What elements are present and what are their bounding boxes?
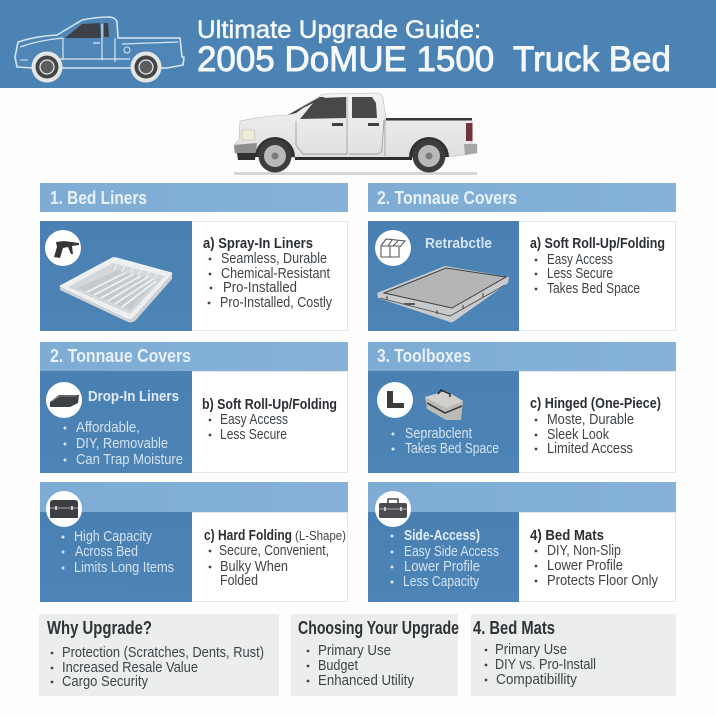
text: spray-in liners: Pro-Installed, Costly (220, 295, 333, 311)
panel: 4. Bed Mats: Primary Use (495, 642, 567, 658)
text: hard folding (204, 528, 346, 589)
list: side-access features: Side-Access) (404, 528, 480, 544)
panel: 4. Bed Mats: Compatibillity (496, 672, 578, 688)
text: hard folding: Folded (220, 573, 258, 589)
list: side-access features: Easy Side Access (404, 544, 499, 560)
panel: side-access toolbox / bed mats (368, 482, 676, 602)
text: bed mats: Lower Profile (547, 558, 623, 574)
header banner (0, 0, 716, 88)
text: soft roll-up: Less Secure (547, 266, 613, 282)
text: soft roll-up: b) Soft Roll-Up/Folding (202, 397, 337, 413)
heading: 3. Toolboxes: 3. Toolboxes (377, 346, 471, 366)
title (197, 16, 671, 79)
text: spray-in liners (203, 236, 333, 311)
list: side-access features (390, 528, 499, 590)
text: soft roll-up: Takes Bed Space (547, 281, 640, 297)
heading: 1. Bed Liners: 1. Bed Liners (50, 188, 147, 208)
list: capacity features: Across Bed (75, 544, 138, 560)
list: side-access features: Less Capacity (403, 574, 480, 590)
text: hard folding: c) Hard Folding (204, 528, 292, 544)
text: bed mats: DIY, Non-Slip (547, 543, 621, 559)
list: capacity features (62, 529, 174, 576)
panel: Choosing Your Upgrade: Primary Use (318, 643, 391, 659)
icon: truck outline (15, 17, 184, 82)
icon: drop-in liner (46, 382, 82, 418)
panel: Choosing Your Upgrade (291, 614, 459, 696)
list: toolbox features (392, 426, 499, 457)
panel: 2. Tonnaue Covers (retractable) (368, 183, 676, 331)
list: drop-in features: DIY, Removable (76, 436, 168, 452)
icon: L-shape (377, 382, 413, 418)
text: soft roll-up: Easy Access (220, 412, 288, 428)
icon: open box with awning (375, 230, 411, 266)
panel: high capacity toolbox / hard folding (40, 482, 348, 602)
label: retractable: Retrabctle (425, 235, 492, 252)
text: spray-in liners: Chemical-Resistant (221, 266, 330, 282)
text: hard folding: (L-Shape) (295, 528, 346, 543)
label: drop-in liners: Drop-In Liners (88, 388, 179, 405)
text: hinged: c) Hinged (One-Piece) (530, 396, 661, 412)
text: soft roll-up: Easy Access (547, 252, 613, 268)
heading: 2. Tonnaue Covers (40, 342, 348, 371)
panel: Why Upgrade? (39, 614, 279, 696)
illustration: toolbox (425, 390, 463, 420)
list: side-access features: Lower Profile (404, 559, 480, 575)
panel: 4. Bed Mats: DIY vs. Pro-Install (495, 657, 596, 673)
heading: 2. Tonnaue Covers (368, 183, 676, 212)
list: capacity features: High Capacity (74, 529, 153, 545)
text: bed mats (530, 528, 659, 589)
text: soft roll-up: a) Soft Roll-Up/Folding (530, 236, 665, 252)
panel: Why Upgrade?: Cargo Security (62, 674, 149, 690)
text: hinged (530, 396, 661, 457)
heading: 3. Toolboxes (368, 342, 676, 371)
list: drop-in features: Can Trap Moisture (76, 452, 183, 468)
panel: Why Upgrade?: Protection (Scratches, Dents, Rust) (62, 645, 264, 661)
text: hinged: Moste, Durable (547, 412, 634, 428)
text: hard folding: Secure, Convenient, (219, 543, 329, 559)
text: bed mats: 4) Bed Mats (530, 528, 604, 544)
illustration: spray-in bed liner tray (60, 258, 172, 322)
text: spray-in liners: Seamless, Durable (221, 251, 327, 267)
list: toolbox features: Takes Bed Space (405, 441, 499, 457)
illustration: tonneau cover (377, 266, 509, 322)
list: capacity features: Limits Long Items (74, 560, 174, 576)
text: spray-in liners: Pro-Installed (223, 280, 297, 296)
panel: 4. Bed Mats: 4. Bed Mats (473, 618, 555, 638)
icon: spray gun (45, 230, 81, 266)
text: soft roll-up (202, 397, 337, 443)
title: 2005 DoMUE 1500 Truck Bed (197, 40, 671, 79)
panel: Choosing Your Upgrade: Budget (318, 658, 358, 674)
text: soft roll-up (530, 236, 665, 297)
icon: briefcase toolbox (375, 491, 411, 527)
panel: 1. Bed Liners (40, 183, 348, 331)
heading: 1. Bed Liners (40, 183, 348, 212)
list: drop-in features (64, 420, 183, 468)
icon: crossover toolbox (46, 491, 82, 527)
panel: Choosing Your Upgrade: Choosing Your Upgrade (298, 618, 459, 638)
panel: Why Upgrade?: Increased Resale Value (62, 660, 198, 676)
list: toolbox features: Seprabclent (405, 426, 472, 442)
text: hard folding: Bulky When (220, 559, 288, 575)
heading: 2. Tonnaue Covers: 2. Tonnaue Covers (50, 346, 191, 366)
text: hinged: Limited Access (547, 441, 633, 457)
text: bed mats: Protects Floor Only (547, 573, 659, 589)
list: drop-in features: Affordable, (76, 420, 140, 436)
text: spray-in liners: a) Spray-In Liners (203, 236, 313, 252)
title: Ultimate Upgrade Guide: (197, 16, 481, 44)
panel: Choosing Your Upgrade: Enhanced Utility (318, 673, 415, 689)
heading: 2. Tonnaue Covers: 2. Tonnaue Covers (377, 188, 517, 208)
panel: 4. Bed Mats (471, 614, 676, 696)
text: hinged: Sleek Look (547, 427, 610, 443)
panel: 2. Tonnaue Covers (drop-in) (40, 342, 348, 473)
panel: 3. Toolboxes (368, 342, 676, 473)
panel: Why Upgrade?: Why Upgrade? (47, 618, 152, 638)
text: soft roll-up: Less Secure (220, 427, 287, 443)
illustration: white pickup truck (234, 93, 477, 175)
